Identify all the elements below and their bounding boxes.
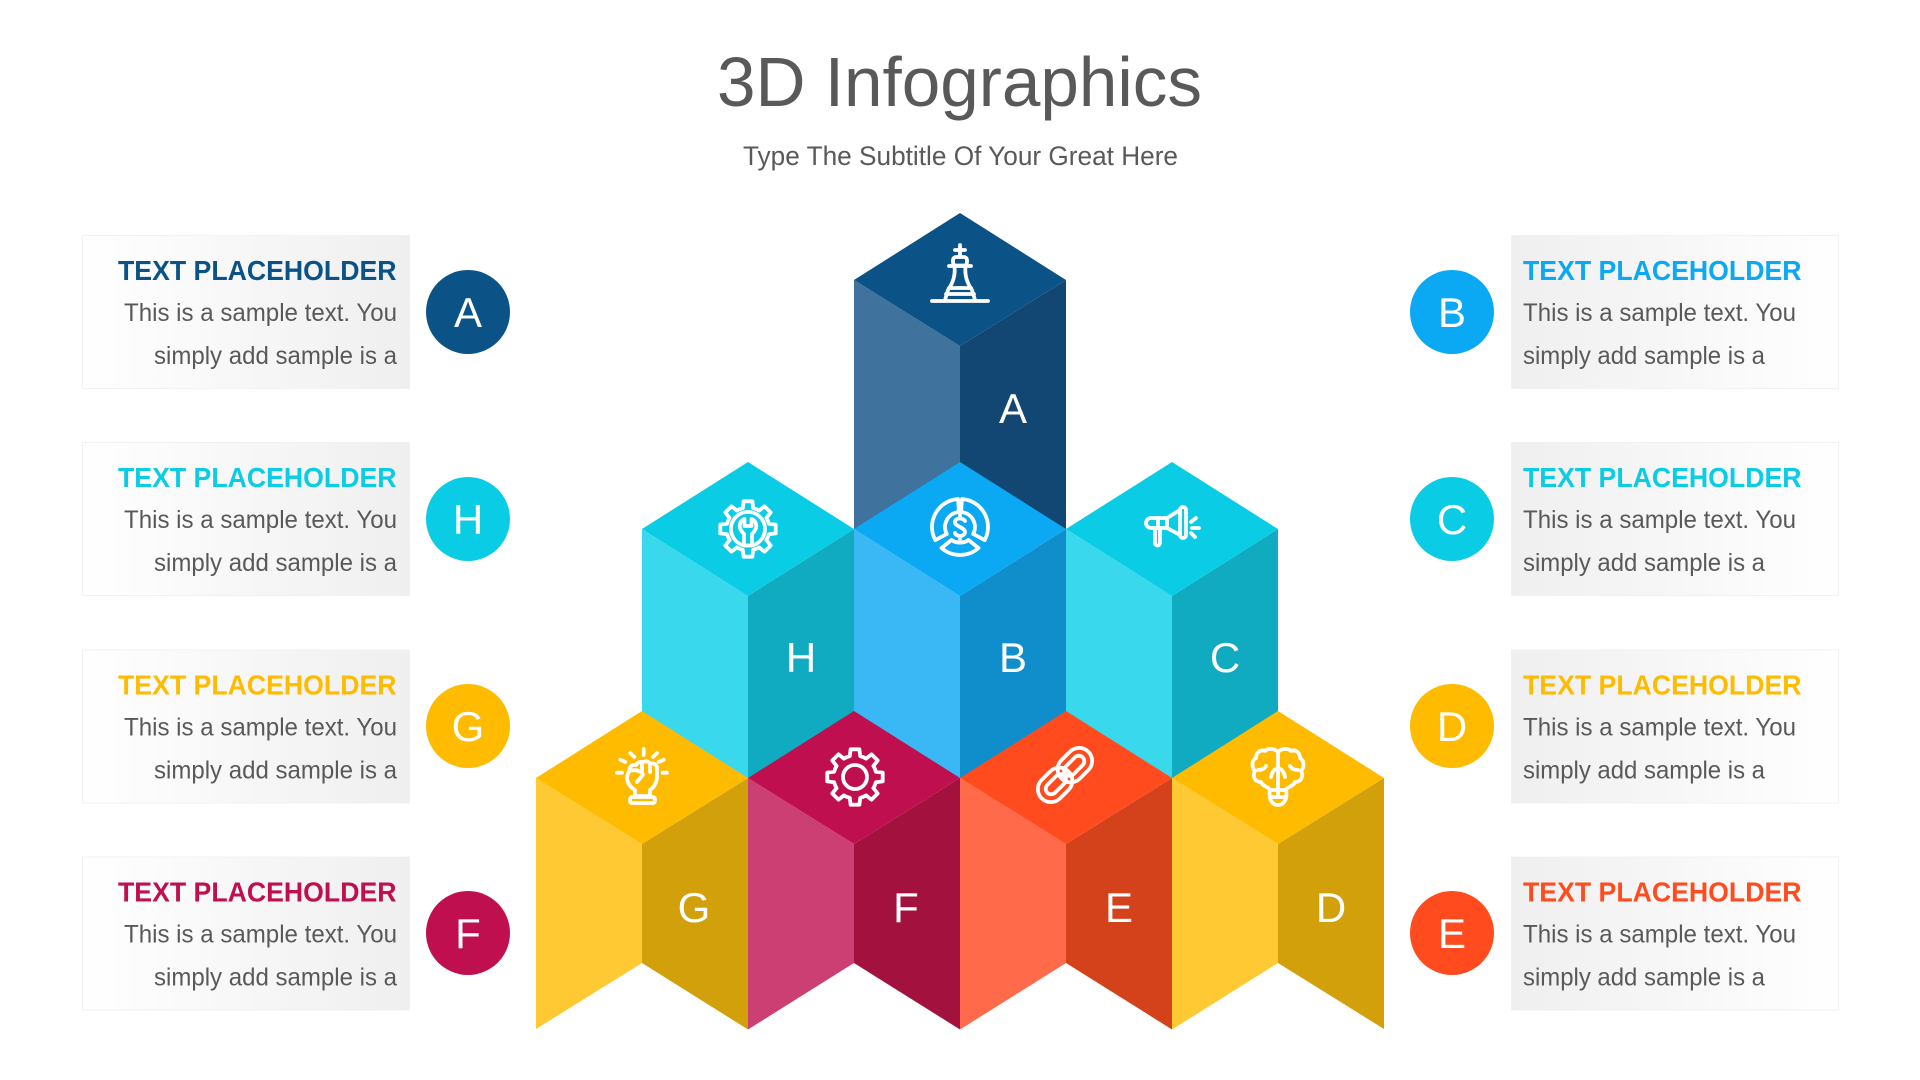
card G — [82, 650, 410, 803]
badge G: G — [452, 703, 484, 750]
badge A: A — [454, 289, 482, 336]
card B: This is a sample text. You — [1523, 299, 1796, 327]
card E: This is a sample text. You — [1523, 920, 1796, 948]
icon: megaphone — [1146, 507, 1199, 546]
badge A — [426, 270, 510, 354]
icon: brain bulb — [1252, 749, 1304, 805]
card D: simply add sample is a — [1523, 756, 1765, 784]
badge G — [426, 684, 510, 768]
card F: simply add sample is a — [154, 964, 397, 992]
card G: This is a sample text. You — [124, 714, 397, 742]
badge B: B — [1438, 289, 1466, 336]
cube G — [536, 711, 748, 1030]
icon: gear with wrench — [720, 501, 776, 557]
badge E: E — [1438, 910, 1466, 957]
card E: simply add sample is a — [1523, 964, 1765, 992]
cube B — [854, 462, 1066, 778]
card E — [1512, 857, 1838, 1010]
card G: simply add sample is a — [154, 756, 397, 784]
badge D: D — [1437, 703, 1467, 750]
badge H — [426, 477, 510, 561]
card A — [82, 236, 410, 388]
cube F: F — [893, 884, 919, 931]
card C: This is a sample text. You — [1523, 506, 1796, 534]
card H: simply add sample is a — [154, 549, 397, 577]
card D: TEXT PLACEHOLDER — [1523, 670, 1802, 700]
cube H — [642, 462, 854, 778]
card D: This is a sample text. You — [1523, 714, 1796, 742]
cube D: D — [1316, 884, 1346, 931]
card D — [1512, 650, 1838, 803]
card C: simply add sample is a — [1523, 549, 1765, 577]
cube B: B — [999, 634, 1027, 681]
card F — [82, 857, 410, 1010]
card E: TEXT PLACEHOLDER — [1523, 876, 1802, 908]
badge D — [1410, 684, 1494, 768]
icon: chess king — [932, 245, 988, 301]
cube A — [854, 213, 1066, 529]
cube D — [1172, 711, 1384, 1030]
card G: TEXT PLACEHOLDER — [118, 670, 396, 700]
cube G: G — [678, 884, 710, 931]
card A: TEXT PLACEHOLDER — [118, 255, 396, 286]
badge B — [1410, 270, 1494, 354]
card F: TEXT PLACEHOLDER — [118, 876, 396, 908]
card F: This is a sample text. You — [124, 920, 397, 948]
subtitle: Type The Subtitle Of Your Great Here — [743, 141, 1178, 171]
card H: TEXT PLACEHOLDER — [118, 462, 396, 493]
badge E — [1410, 891, 1494, 975]
cube E — [960, 711, 1172, 1030]
badge C: C — [1437, 496, 1467, 543]
card H: This is a sample text. You — [124, 506, 397, 534]
badge F: F — [455, 910, 481, 957]
card B: TEXT PLACEHOLDER — [1523, 255, 1802, 286]
badge F — [426, 891, 510, 975]
cube E: E — [1105, 884, 1133, 931]
badge H: H — [453, 496, 483, 543]
icon: dollar segments — [932, 499, 988, 555]
card A: This is a sample text. You — [124, 299, 397, 327]
icon: chain link — [1032, 742, 1098, 808]
card H — [82, 442, 410, 596]
card C: TEXT PLACEHOLDER — [1523, 462, 1802, 493]
card A: simply add sample is a — [154, 342, 397, 370]
icon: raised fist — [617, 749, 667, 803]
icon: gear — [827, 749, 883, 805]
cube F — [748, 711, 960, 1030]
cube C: C — [1210, 634, 1240, 681]
cube A: A — [999, 385, 1027, 432]
cube C — [1066, 462, 1278, 778]
card B: simply add sample is a — [1523, 342, 1765, 370]
badge C — [1410, 477, 1494, 561]
cube H: H — [786, 634, 816, 681]
card B — [1512, 236, 1838, 388]
title: 3D Infographics — [717, 43, 1202, 121]
card C — [1512, 442, 1838, 596]
